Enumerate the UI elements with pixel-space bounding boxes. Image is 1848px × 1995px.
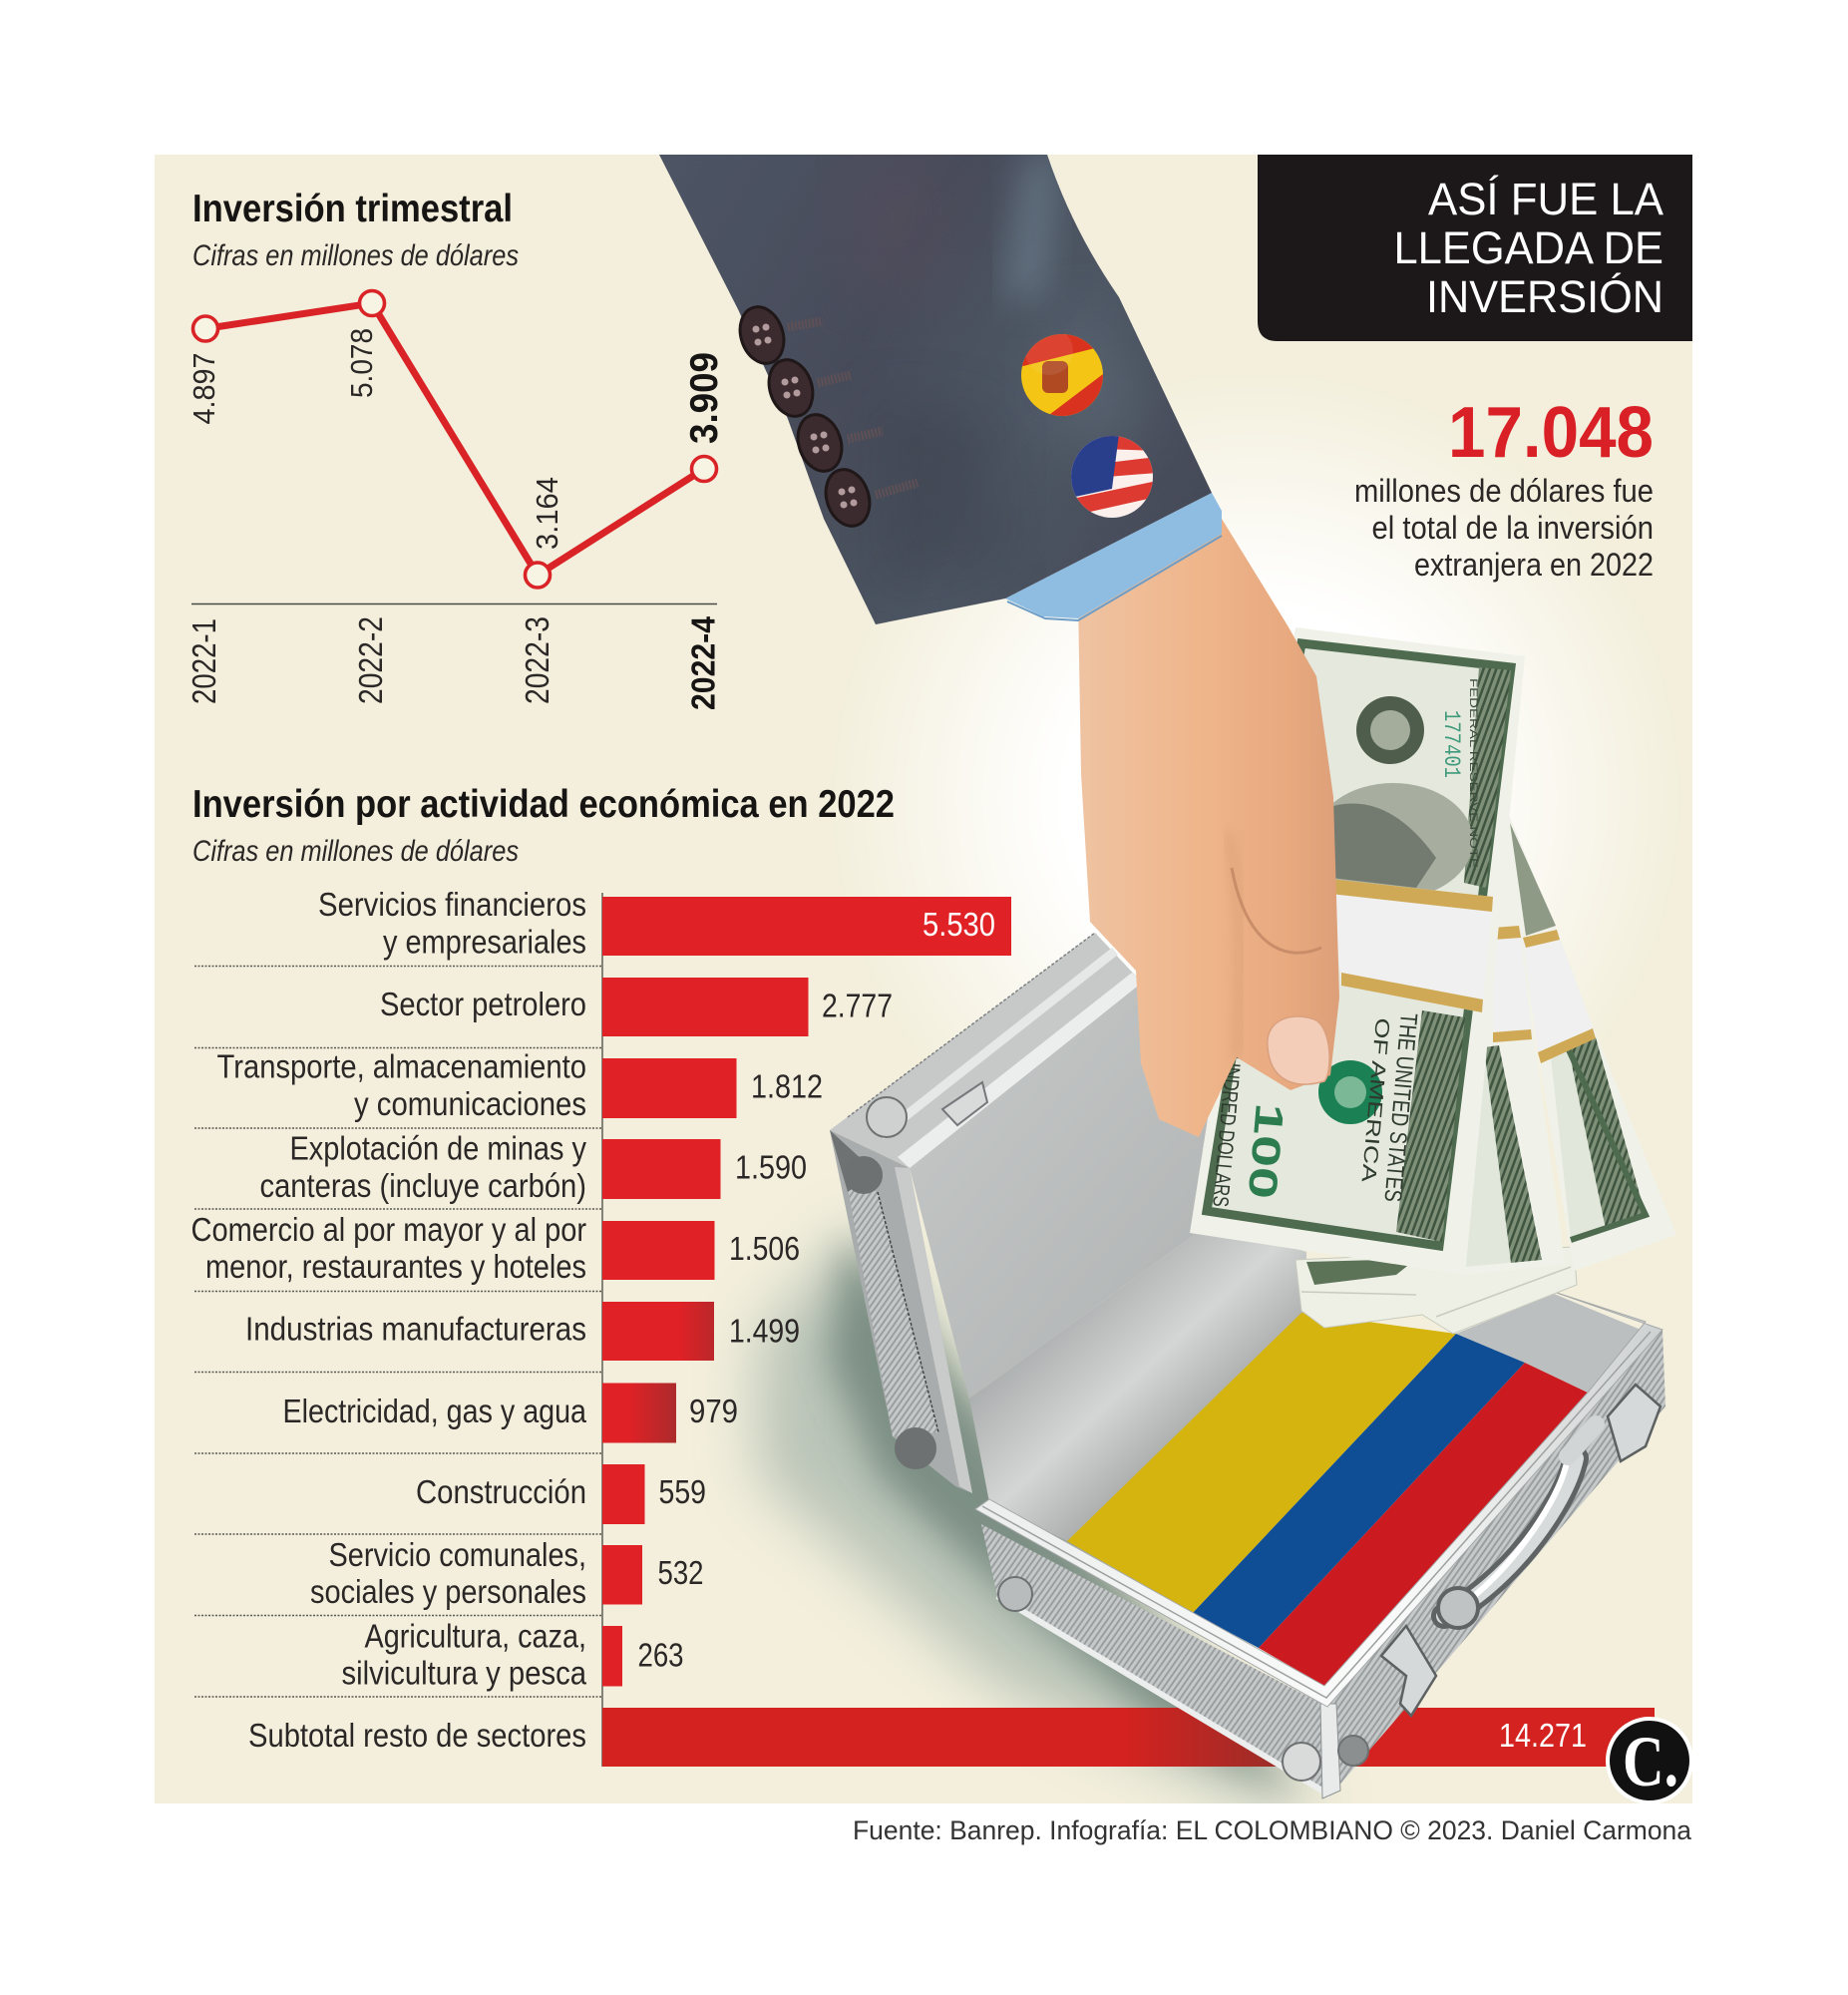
- illustration: open silver briefcase: [830, 933, 1665, 1798]
- illustration: stacks of dollar bills: [1190, 627, 1676, 1334]
- key figure: 17.048: 17.048: [1448, 393, 1654, 473]
- pin: USA flag: [1071, 436, 1153, 518]
- key figure: 17.048: millones de dólares fue: [1354, 473, 1654, 509]
- front stack: 177401: [1438, 710, 1464, 778]
- row: Industrias manufactureras: Industrias manufactureras: [245, 1311, 586, 1347]
- panel: cream background: [155, 155, 1692, 1803]
- lower bill engraving: OF AMERICA: [1357, 1017, 1393, 1184]
- line chart: quarterly investment: 4.897: [186, 353, 221, 425]
- key figure: 17.048: el total de la inversión: [1372, 510, 1654, 546]
- front stack: [1190, 627, 1525, 1275]
- Colombian flag: blue: [1193, 1334, 1525, 1648]
- row: Electricidad: [283, 1383, 738, 1442]
- lower bill engraving: ONE HUNDRED DOLLARS: [1208, 1002, 1251, 1208]
- row: Explotación de minas: 1.590: [735, 1149, 807, 1185]
- row: Transporte: 1.812: [751, 1067, 823, 1105]
- sleeve fabric: [659, 155, 1212, 624]
- row: Industrias manufactureras: [245, 1302, 800, 1361]
- front stack: FEDERAL RESERVE NOTE: [1467, 678, 1479, 868]
- Colombian flag: yellow: [1067, 1313, 1456, 1613]
- case rim: [975, 1292, 1663, 1707]
- Colombian flag: red: [1259, 1363, 1588, 1686]
- row: Servicios financieros: 5.530: [923, 906, 995, 943]
- row: Explotación de minas: canteras (incluye carbón): [259, 1167, 586, 1204]
- case left side: [981, 1524, 1330, 1796]
- lid back wall: [969, 1222, 1306, 1541]
- source credit: Fuente: Banrep. Infografía: EL COLOMBIANO © 2023. Daniel Carmona: [853, 1815, 1692, 1845]
- line chart: quarterly investment: 2022-1: [185, 618, 222, 704]
- lower bill engraving: [1208, 1002, 1465, 1242]
- row: Servicio comunales: [310, 1536, 704, 1610]
- lid clasp: [942, 1082, 987, 1125]
- row: Comercio: [191, 1211, 800, 1285]
- row: Agricultura: [341, 1618, 684, 1692]
- row: Sector petrolero: [380, 978, 893, 1036]
- middle stack: [1465, 813, 1565, 1275]
- line chart: quarterly investment: 2022-2: [352, 616, 389, 704]
- title box: INVERSIÓN: [1426, 271, 1663, 322]
- row: Servicio comunales: 532: [658, 1554, 704, 1591]
- row: Servicios financieros: [318, 886, 1011, 960]
- lower bill engraving: 100: [1240, 1101, 1292, 1201]
- subtotal value: 14.271: [1499, 1717, 1587, 1754]
- case inner wall right: [1456, 1294, 1646, 1393]
- case latches: [1381, 1385, 1661, 1716]
- lid inner face: [910, 983, 1257, 1398]
- logo: El Colombiano: C.: [1623, 1722, 1678, 1801]
- line chart: quarterly investment: 3.164: [530, 477, 564, 550]
- row: Servicio comunales: Servicio comunales,: [329, 1536, 586, 1573]
- title box: ASÍ FUE LA: [1428, 174, 1663, 224]
- line chart: quarterly investment: 5.078: [344, 328, 379, 398]
- line chart: quarterly investment: [185, 291, 726, 710]
- illustration: hand and wrist: [1078, 519, 1339, 1137]
- lower bill engraving: THE UNITED STATES: [1378, 1011, 1422, 1203]
- row: Electricidad: Electricidad, gas y agua: [283, 1393, 587, 1429]
- row: Explotación de minas: [259, 1129, 807, 1204]
- row: Construcción: 559: [658, 1473, 706, 1510]
- row: Transporte: Transporte, almacenamiento: [217, 1047, 586, 1085]
- pin: Spain flag: [1021, 334, 1103, 416]
- key figure: 17.048: extranjera en 2022: [1414, 547, 1654, 583]
- row: Subtotal resto de sectores: Subtotal resto de sectores: [248, 1717, 586, 1754]
- bar chart: investment by sector: [191, 886, 1655, 1767]
- line chart: quarterly investment: 2022-4: [684, 615, 722, 710]
- row: Construcción: Construcción: [416, 1473, 586, 1510]
- heading: Inversión por actividad económica: Inversión por actividad económica en 2022: [192, 783, 895, 826]
- row: Subtotal resto de sectores: [248, 1708, 1655, 1767]
- heading: Inversión trimestral: Inversión trimestral: [192, 188, 513, 230]
- back stack: [1506, 808, 1676, 1271]
- sleeve buttons: [733, 301, 877, 532]
- case right side: [1327, 1330, 1665, 1796]
- shirt cuff: [1005, 493, 1222, 618]
- row: Servicios financieros: Servicios financieros: [318, 886, 586, 923]
- key figure: 17.048: [1354, 393, 1654, 583]
- lid spine: [830, 1130, 972, 1493]
- paper band: [1330, 879, 1493, 1012]
- row: Industrias manufactureras: 1.499: [729, 1313, 800, 1349]
- row: Transporte: y comunicaciones: [354, 1085, 586, 1122]
- lower stack edge: [1295, 1247, 1577, 1334]
- lid top rim: [830, 933, 1142, 1168]
- case handle: [1438, 1424, 1596, 1628]
- row: Sector petrolero: Sector petrolero: [380, 986, 586, 1022]
- row: Comercio: menor, restaurantes y hoteles: [205, 1248, 586, 1285]
- row: Sector petrolero: 2.777: [822, 988, 893, 1023]
- case corner: [1320, 1704, 1340, 1798]
- row: Agricultura: 263: [638, 1636, 684, 1674]
- title box: [1258, 155, 1692, 341]
- row: Electricidad: 979: [689, 1393, 738, 1429]
- row: Agricultura: Agricultura, caza,: [365, 1618, 586, 1654]
- row: Construcción: [416, 1464, 706, 1524]
- case drop shadow: [758, 1227, 1326, 1810]
- subheading: quarterly units: Cifras en millones de dólares: [192, 239, 519, 272]
- subheading: sector units: Cifras en millones de dólares: [192, 835, 519, 868]
- line chart: quarterly investment: 2022-3: [519, 616, 555, 704]
- row: Comercio: 1.506: [729, 1230, 800, 1267]
- row: Explotación de minas: Explotación de minas y: [289, 1129, 586, 1167]
- line chart: quarterly investment: 3.909: [683, 352, 726, 444]
- buttonhole stitches: [788, 321, 918, 495]
- thumb nail: [1268, 1016, 1329, 1084]
- row: Agricultura: silvicultura y pesca: [341, 1654, 587, 1692]
- row: Servicio comunales: sociales y personales: [310, 1573, 586, 1610]
- row: Transporte: [217, 1047, 823, 1122]
- case rivets: [846, 1097, 1368, 1781]
- title box: LLEGADA DE: [1394, 222, 1663, 273]
- illustration: jacket sleeve: [659, 155, 1222, 624]
- row: Servicios financieros: y empresariales: [383, 924, 586, 960]
- row: Comercio: Comercio al por mayor y al por: [191, 1211, 586, 1248]
